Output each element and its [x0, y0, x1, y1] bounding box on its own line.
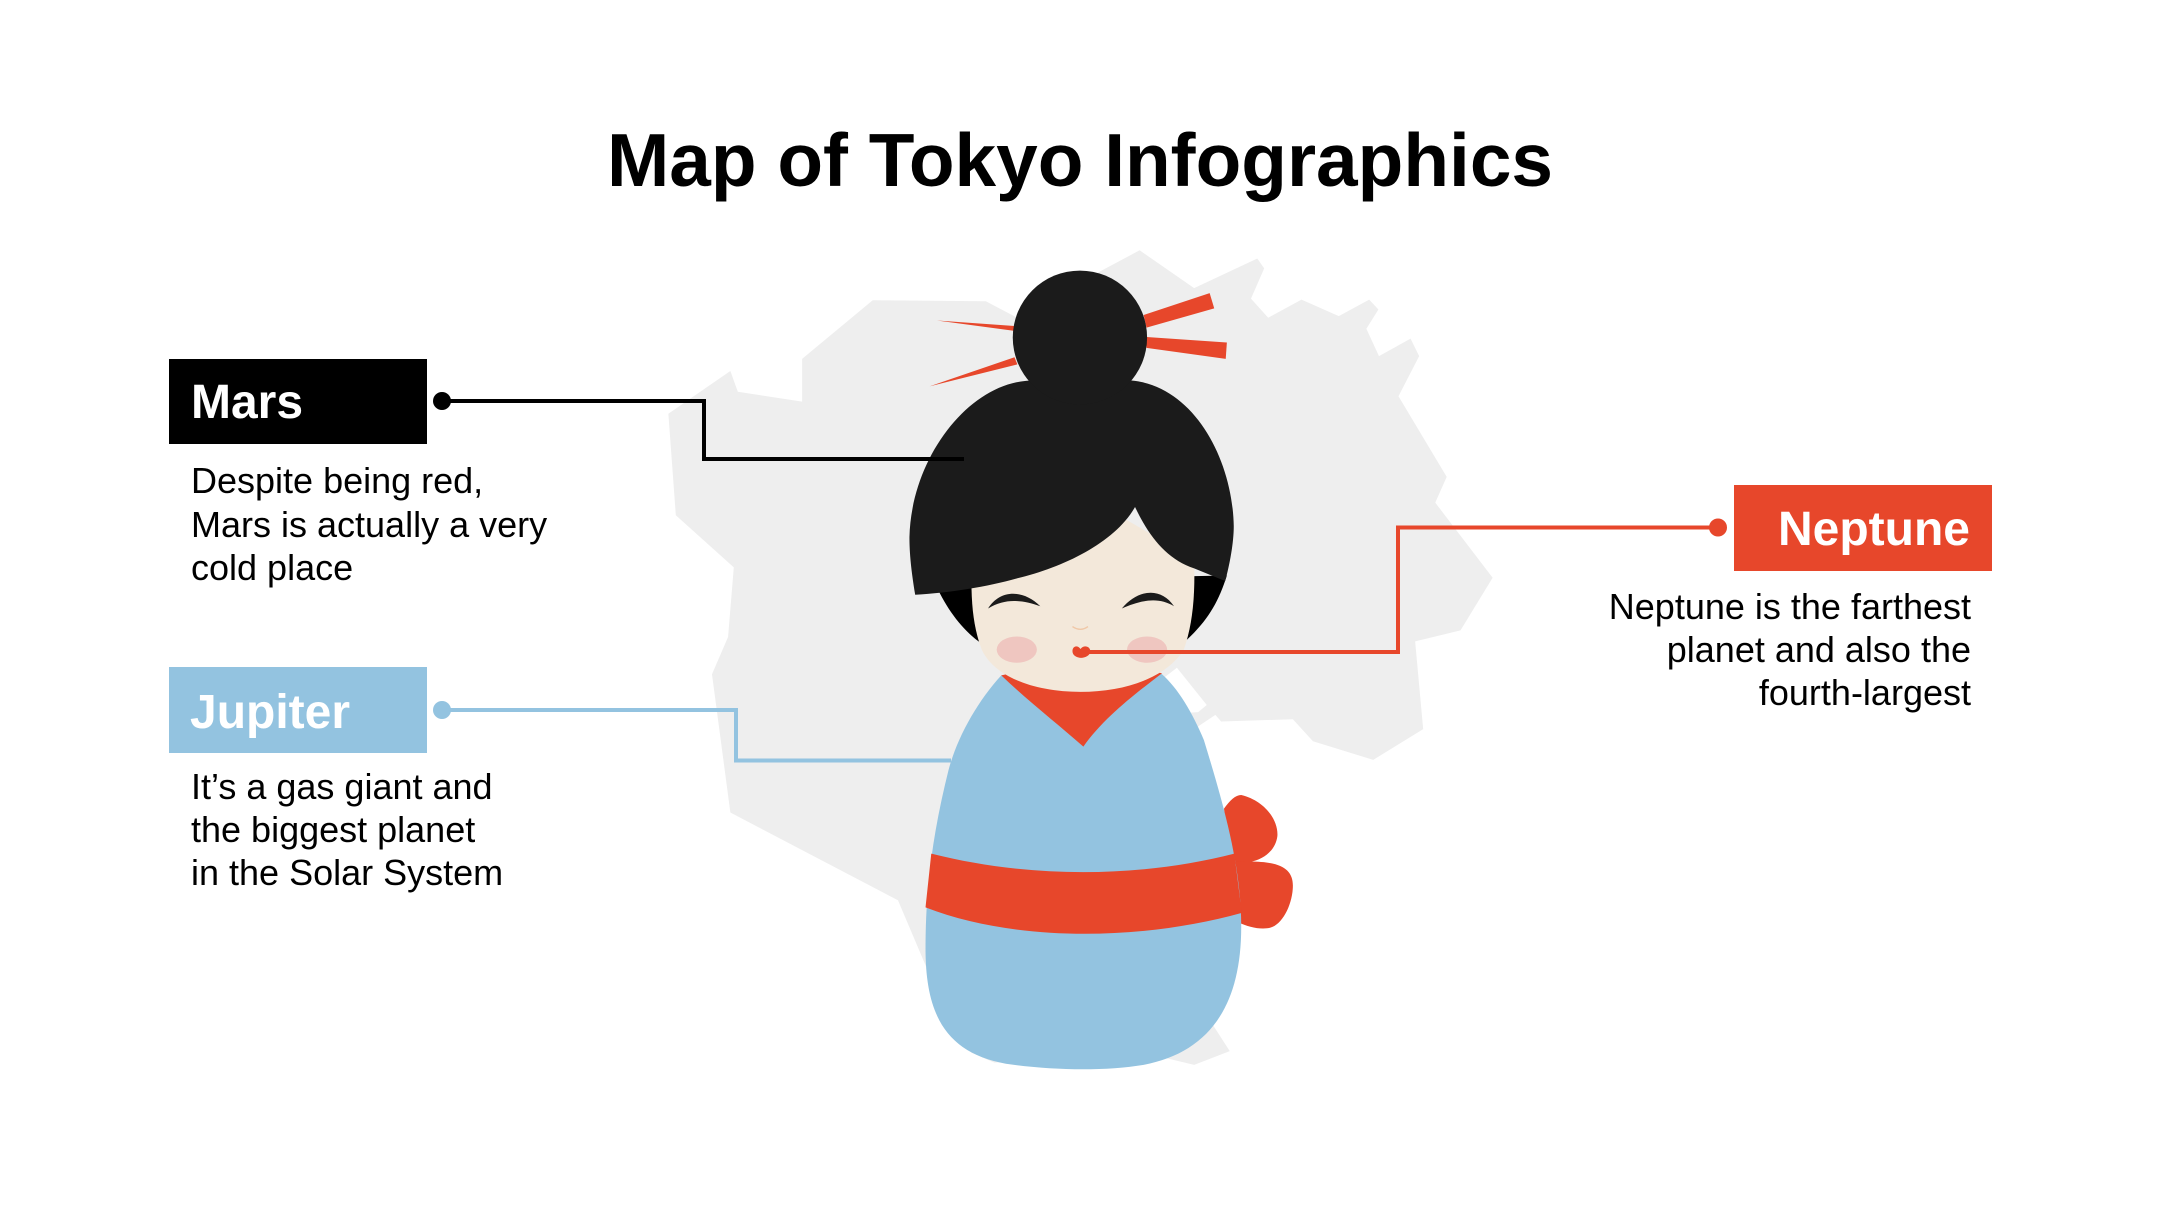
Jupiter description: in the Solar System	[191, 852, 503, 893]
face	[971, 493, 1194, 692]
map of Tokyo silhouette	[668, 250, 1493, 1065]
Neptune heading: Neptune	[1778, 503, 1970, 556]
Mars label box	[169, 359, 427, 444]
kimono collar	[1001, 658, 1162, 747]
front hair	[909, 378, 1234, 595]
connector: Mars	[433, 392, 964, 459]
hair bun	[1013, 271, 1147, 404]
icon: lips	[1072, 646, 1090, 658]
obi belt	[926, 854, 1242, 934]
Neptune label box	[1734, 485, 1992, 571]
Mars description: cold place	[191, 547, 353, 588]
panel: Jupiter	[169, 667, 503, 893]
Jupiter description: the biggest planet	[191, 809, 475, 850]
Jupiter description: It’s a gas giant and	[191, 766, 493, 807]
panel: Neptune	[1609, 485, 1992, 713]
icon: hair pins	[930, 293, 1227, 386]
icon: nose	[1072, 627, 1088, 629]
panel: Mars	[169, 359, 547, 588]
Mars heading: Mars	[191, 376, 303, 429]
icon: right eye	[1122, 593, 1174, 608]
Mars description: Mars is actually a very	[191, 504, 547, 545]
Neptune description: Neptune is the farthest	[1609, 586, 1971, 627]
Jupiter label box	[169, 667, 427, 753]
icon: obi bow	[1224, 795, 1293, 928]
kimono body	[926, 673, 1241, 1069]
Neptune description: fourth-largest	[1759, 672, 1971, 713]
connector: Neptune	[1081, 518, 1727, 652]
Neptune description: planet and also the	[1667, 629, 1971, 670]
kimono doll figure	[909, 271, 1293, 1069]
title: Map of Tokyo Infographics	[607, 118, 1553, 202]
icon: right cheek	[1127, 636, 1167, 663]
back hair	[934, 576, 1227, 642]
connector: Jupiter	[433, 701, 951, 760]
Mars description: Despite being red,	[191, 460, 483, 501]
icon: left eye	[988, 594, 1040, 608]
icon: left cheek	[997, 636, 1037, 663]
Jupiter heading: Jupiter	[190, 686, 350, 739]
